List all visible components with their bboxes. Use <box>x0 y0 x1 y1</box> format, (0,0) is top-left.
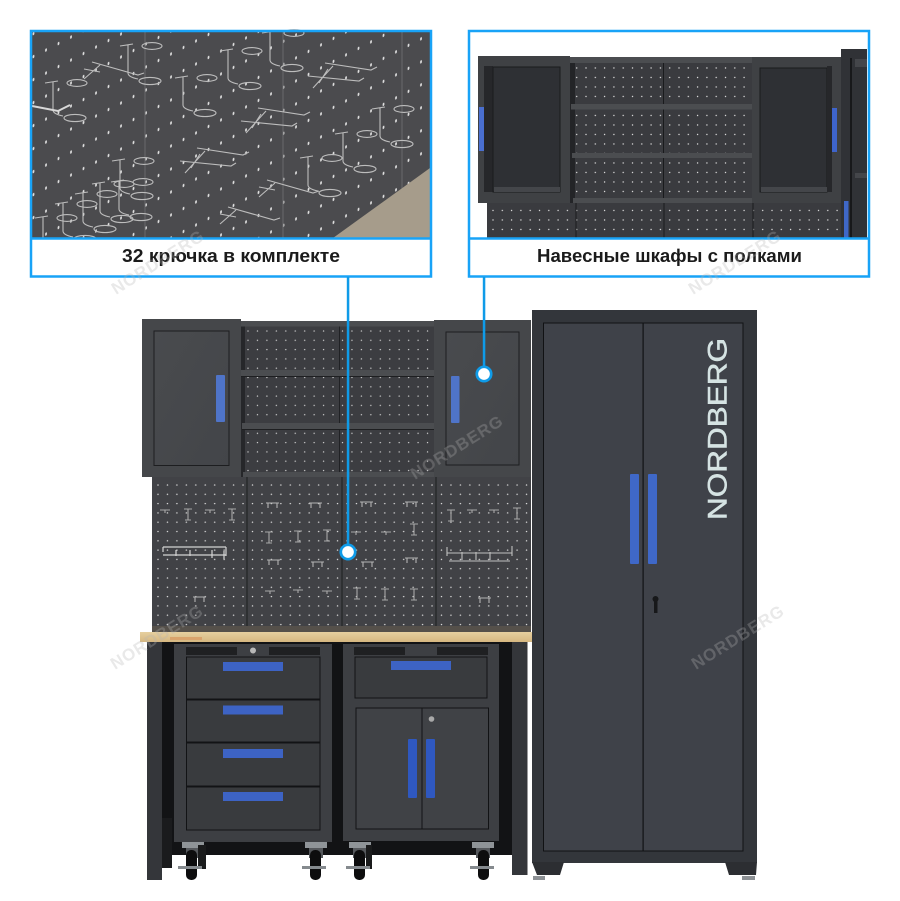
watermarks: NORDBERG <box>685 227 784 298</box>
caption <box>469 239 869 276</box>
inset frame <box>469 31 869 276</box>
panel: wall cabinet right <box>434 320 531 477</box>
tall cabinet edge <box>841 49 867 238</box>
NORDBERG logo: NORDBERG <box>702 338 732 520</box>
callout line: hooks <box>341 277 355 559</box>
latch strips <box>354 647 488 655</box>
watermarks: NORDBERG <box>407 412 506 483</box>
shelf 2 <box>242 423 434 430</box>
left leg <box>147 642 162 880</box>
right cabinet handle <box>451 376 460 423</box>
left cabinet door <box>154 331 229 466</box>
tall cabinet doors <box>544 323 743 851</box>
caption <box>31 239 431 276</box>
inset frame <box>31 31 431 276</box>
drawer 2 <box>186 700 320 742</box>
panel: lower pegboard with hooks <box>152 477 531 632</box>
right leg <box>512 640 528 875</box>
open left door <box>478 56 570 203</box>
doors <box>356 708 488 829</box>
right cabinet door <box>446 332 519 465</box>
watermarks: NORDBERG <box>107 602 206 673</box>
drawer 4 <box>186 787 320 830</box>
tall cabinet handles <box>630 474 657 564</box>
watermarks <box>107 227 787 673</box>
lower pegboard strip <box>487 203 841 238</box>
watermarks: NORDBERG <box>688 602 787 673</box>
photo: pegboard close-up <box>32 30 430 257</box>
feet <box>532 862 757 875</box>
small hooks <box>160 502 521 603</box>
photo: open wall cabinets <box>469 32 869 238</box>
icon: casters <box>178 842 494 880</box>
hook rail left <box>163 547 226 559</box>
latch strips and lock <box>186 647 320 655</box>
shelf 1 <box>241 370 434 377</box>
open right door <box>752 57 841 203</box>
lock with key <box>652 596 658 613</box>
glides <box>533 876 755 880</box>
panel: wall cabinets inset <box>469 31 869 276</box>
drawer 3 <box>186 743 320 786</box>
drawer 1 <box>186 657 320 699</box>
panel: rolling drawer cabinet <box>174 644 332 842</box>
watermarks: NORDBERG <box>108 227 207 298</box>
hook rail right <box>447 546 512 561</box>
center shelves <box>570 57 752 203</box>
callout marker <box>341 545 355 559</box>
left cabinet handle <box>216 375 225 422</box>
panel: rolling door cabinet <box>343 644 499 841</box>
caption: Навесные шкафы с полками <box>537 246 802 266</box>
callout marker <box>477 367 491 381</box>
silver hooks <box>32 30 414 257</box>
panel: wall cabinet left <box>142 319 241 477</box>
top drawer <box>355 657 487 698</box>
wooden worktop <box>140 632 532 642</box>
caption: 32 крючка в комплекте <box>122 246 340 266</box>
panel: hooks inset <box>31 30 431 276</box>
callout line: wall cabinets <box>477 277 491 381</box>
workbench base <box>147 640 528 880</box>
panel: upper pegboard with shelves <box>241 321 434 477</box>
panel: tall cabinet <box>532 310 757 880</box>
shelf 3 <box>243 472 434 477</box>
